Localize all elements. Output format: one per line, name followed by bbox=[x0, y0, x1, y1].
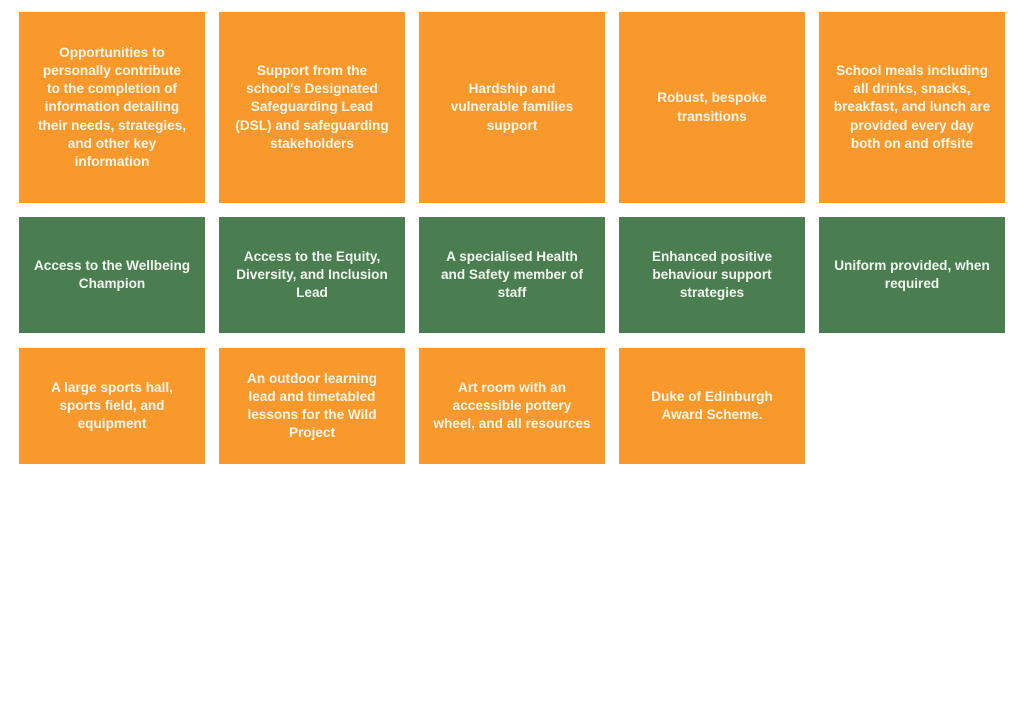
card: personal contribution: information bbox=[75, 154, 149, 169]
card: uniform: Uniform provided, when bbox=[834, 258, 990, 273]
card: health and safety bbox=[419, 217, 605, 333]
card: uniform bbox=[819, 217, 1005, 333]
card: hardship support: vulnerable families bbox=[451, 99, 573, 114]
card: school meals: both on and offsite bbox=[851, 136, 973, 151]
card: outdoor learning bbox=[219, 348, 405, 464]
card: outdoor learning: Project bbox=[289, 425, 335, 440]
card: sports hall bbox=[19, 348, 205, 464]
card: art room: Art room with an bbox=[458, 380, 566, 395]
card: sports hall: A large sports hall, bbox=[51, 380, 173, 395]
card: school meals: breakfast, and lunch are bbox=[834, 99, 990, 114]
card: uniform: required bbox=[885, 276, 939, 291]
card: transitions: Robust, bespoke bbox=[657, 90, 767, 105]
card: school meals bbox=[819, 12, 1005, 203]
card: art room: accessible pottery bbox=[453, 398, 571, 413]
card: art room bbox=[419, 348, 605, 464]
card: hardship support: Hardship and bbox=[469, 81, 555, 96]
card: Duke of Edinburgh: Duke of Edinburgh bbox=[651, 389, 773, 404]
card: behaviour support bbox=[619, 217, 805, 333]
card: personal contribution: Opportunities to bbox=[59, 45, 165, 60]
card: health and safety: staff bbox=[498, 285, 526, 300]
card: school meals: provided every day bbox=[850, 118, 974, 133]
card: art room: wheel, and all resources bbox=[433, 416, 591, 431]
card: behaviour support: Enhanced positive bbox=[652, 249, 772, 264]
card: hardship support: support bbox=[487, 118, 537, 133]
card: wellbeing champion: Champion bbox=[79, 276, 145, 291]
card: safeguarding support: school's Designated bbox=[246, 81, 378, 96]
card: wellbeing champion: Access to the Wellbeing bbox=[34, 258, 190, 273]
card: outdoor learning: lead and timetabled bbox=[249, 389, 375, 404]
card: personal contribution: and other key bbox=[68, 136, 156, 151]
card: transitions bbox=[619, 12, 805, 203]
card: safeguarding support: (DSL) and safeguarding bbox=[235, 118, 389, 133]
card: school meals: School meals including bbox=[836, 63, 988, 78]
card: outdoor learning: lessons for the Wild bbox=[247, 407, 377, 422]
card: EDI lead: Lead bbox=[296, 285, 328, 300]
card: health and safety: and Safety member of bbox=[441, 267, 583, 282]
card: personal contribution: their needs, strategies, bbox=[38, 118, 186, 133]
card: personal contribution: to the completion of bbox=[47, 81, 177, 96]
card: transitions: transitions bbox=[677, 108, 747, 124]
card: health and safety: A specialised Health bbox=[446, 249, 578, 264]
card: wellbeing champion bbox=[19, 217, 205, 333]
card: safeguarding support bbox=[219, 12, 405, 203]
card: sports hall: sports field, and bbox=[60, 398, 164, 413]
card: behaviour support: strategies bbox=[680, 285, 744, 300]
card: safeguarding support: Safeguarding Lead bbox=[251, 99, 373, 114]
card: sports hall: equipment bbox=[78, 416, 146, 431]
card: personal contribution bbox=[19, 12, 205, 203]
card: personal contribution: information detailing bbox=[45, 99, 179, 114]
card: safeguarding support: stakeholders bbox=[270, 136, 354, 151]
card: Duke of Edinburgh: Award Scheme. bbox=[662, 407, 762, 422]
card: hardship support bbox=[419, 12, 605, 203]
card: outdoor learning: An outdoor learning bbox=[247, 371, 377, 386]
card: EDI lead: Diversity, and Inclusion bbox=[236, 267, 388, 282]
card: personal contribution: personally contribute bbox=[43, 63, 181, 78]
card: EDI lead: Access to the Equity, bbox=[244, 249, 380, 264]
card: safeguarding support: Support from the bbox=[257, 63, 367, 78]
card: EDI lead bbox=[219, 217, 405, 333]
card: Duke of Edinburgh bbox=[619, 348, 805, 464]
card: behaviour support: behaviour support bbox=[652, 267, 772, 282]
card: school meals: all drinks, snacks, bbox=[853, 81, 971, 96]
